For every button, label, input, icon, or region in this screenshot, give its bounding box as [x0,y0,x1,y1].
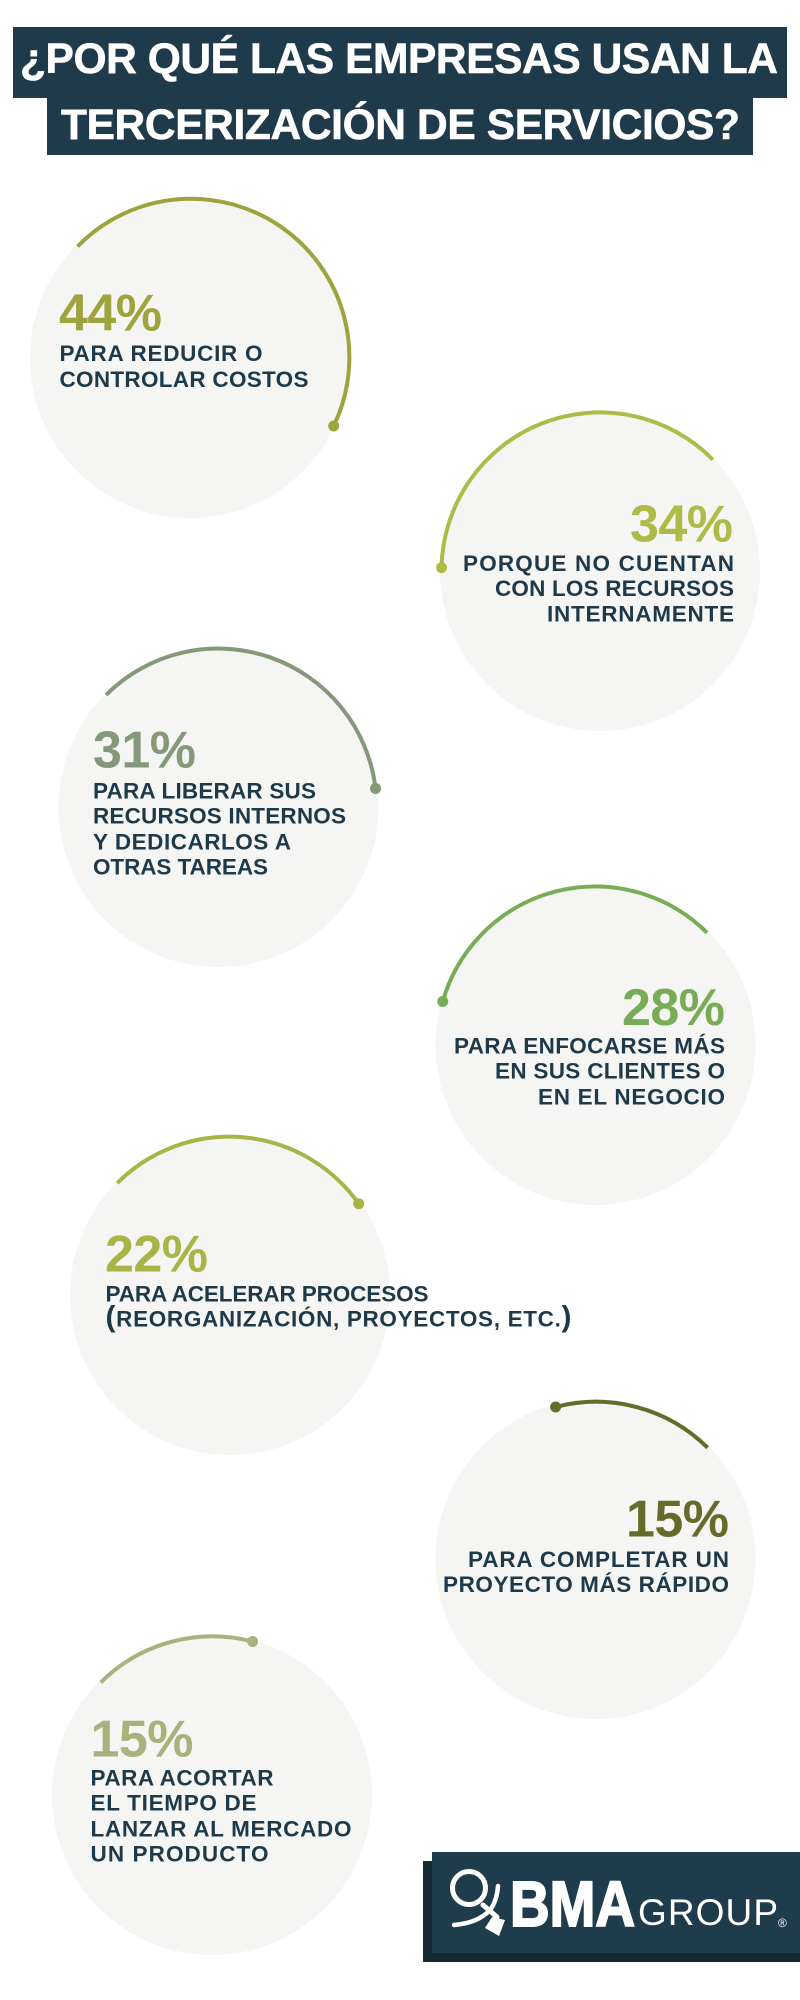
title [13,27,787,155]
panel: 44% reducir costos [30,198,350,518]
logo: BMA Group [423,1852,800,1962]
arc: 34% [436,412,713,573]
panel: 15% completar proyecto: 15% [626,1491,729,1549]
panel: 15% acortar tiempo: UN PRODUCTO [90,1842,268,1867]
arc: 22% [117,1137,364,1209]
panel: 31% liberar recursos [58,647,381,967]
panel: 28% clientes [436,885,756,1205]
logo: BMA Group: BMA [510,1868,635,1940]
arc: 28% [437,886,707,1007]
panel: 15% acortar tiempo: PARA ACORTAR [90,1766,274,1791]
panel: 34% sin recursos: INTERNAMENTE [547,602,734,627]
panel: 34% sin recursos: PORQUE NO CUENTAN [463,551,734,576]
panel: 31% liberar recursos: RECURSOS INTERNOS [93,804,346,829]
panel: 22% acelerar procesos: (REORGANIZACIÓN, PROYECTOS, ETC.) [106,1301,572,1334]
panel: 44% reducir costos: 44% [59,285,162,343]
panel: 28% clientes: PARA ENFOCARSE MÁS [454,1034,725,1059]
arc: 15% [550,1402,708,1448]
panel: 34% sin recursos: 34% [630,496,733,554]
arc: 15% mercado [101,1636,258,1682]
panel: 31% liberar recursos: 31% [93,722,196,780]
panel: 15% acortar tiempo: EL TIEMPO DE [90,1791,256,1816]
panel: 31% liberar recursos: OTRAS TAREAS [93,855,268,880]
panel: 15% acortar tiempo: LANZAR AL MERCADO [90,1817,352,1842]
panel: 31% liberar recursos: PARA LIBERAR SUS [93,779,316,804]
title: TERCERIZACIÓN DE SERVICIOS? [61,100,740,149]
panel: 34% sin recursos: CON LOS RECURSOS [495,576,734,601]
title: ¿POR QUÉ LAS EMPRESAS USAN LA [20,35,778,83]
panel: 44% reducir costos: PARA REDUCIR O [60,341,262,366]
icon: magnifying glass [452,1872,505,1936]
panel: 22% acelerar procesos [70,1135,572,1455]
panel: 22% acelerar procesos: 22% [105,1226,208,1284]
panel: 15% acortar tiempo [52,1635,372,1955]
panel: 34% sin recursos [436,411,760,731]
panel: 28% clientes: 28% [622,979,725,1037]
panel: 28% clientes: EN SUS CLIENTES O [495,1059,725,1084]
panel: 15% completar proyecto [436,1399,756,1719]
panel: 15% completar proyecto: PROYECTO MÁS RÁPIDO [443,1572,729,1597]
panel: 22% acelerar procesos: PARA ACELERAR PROCESOS [106,1282,428,1307]
arc: 44% [78,199,349,432]
panel: 15% completar proyecto: PARA COMPLETAR UN [468,1547,729,1572]
panel: 28% clientes: EN EL NEGOCIO [538,1085,725,1110]
logo: BMA Group: ® [778,1916,787,1930]
panel: 44% reducir costos: CONTROLAR COSTOS [60,367,308,392]
arc: 31% [106,649,381,794]
panel: 15% acortar tiempo: 15% [90,1711,194,1769]
panel: 31% liberar recursos: Y DEDICARLOS A [93,830,291,855]
logo: BMA Group: GROUP [638,1892,778,1933]
